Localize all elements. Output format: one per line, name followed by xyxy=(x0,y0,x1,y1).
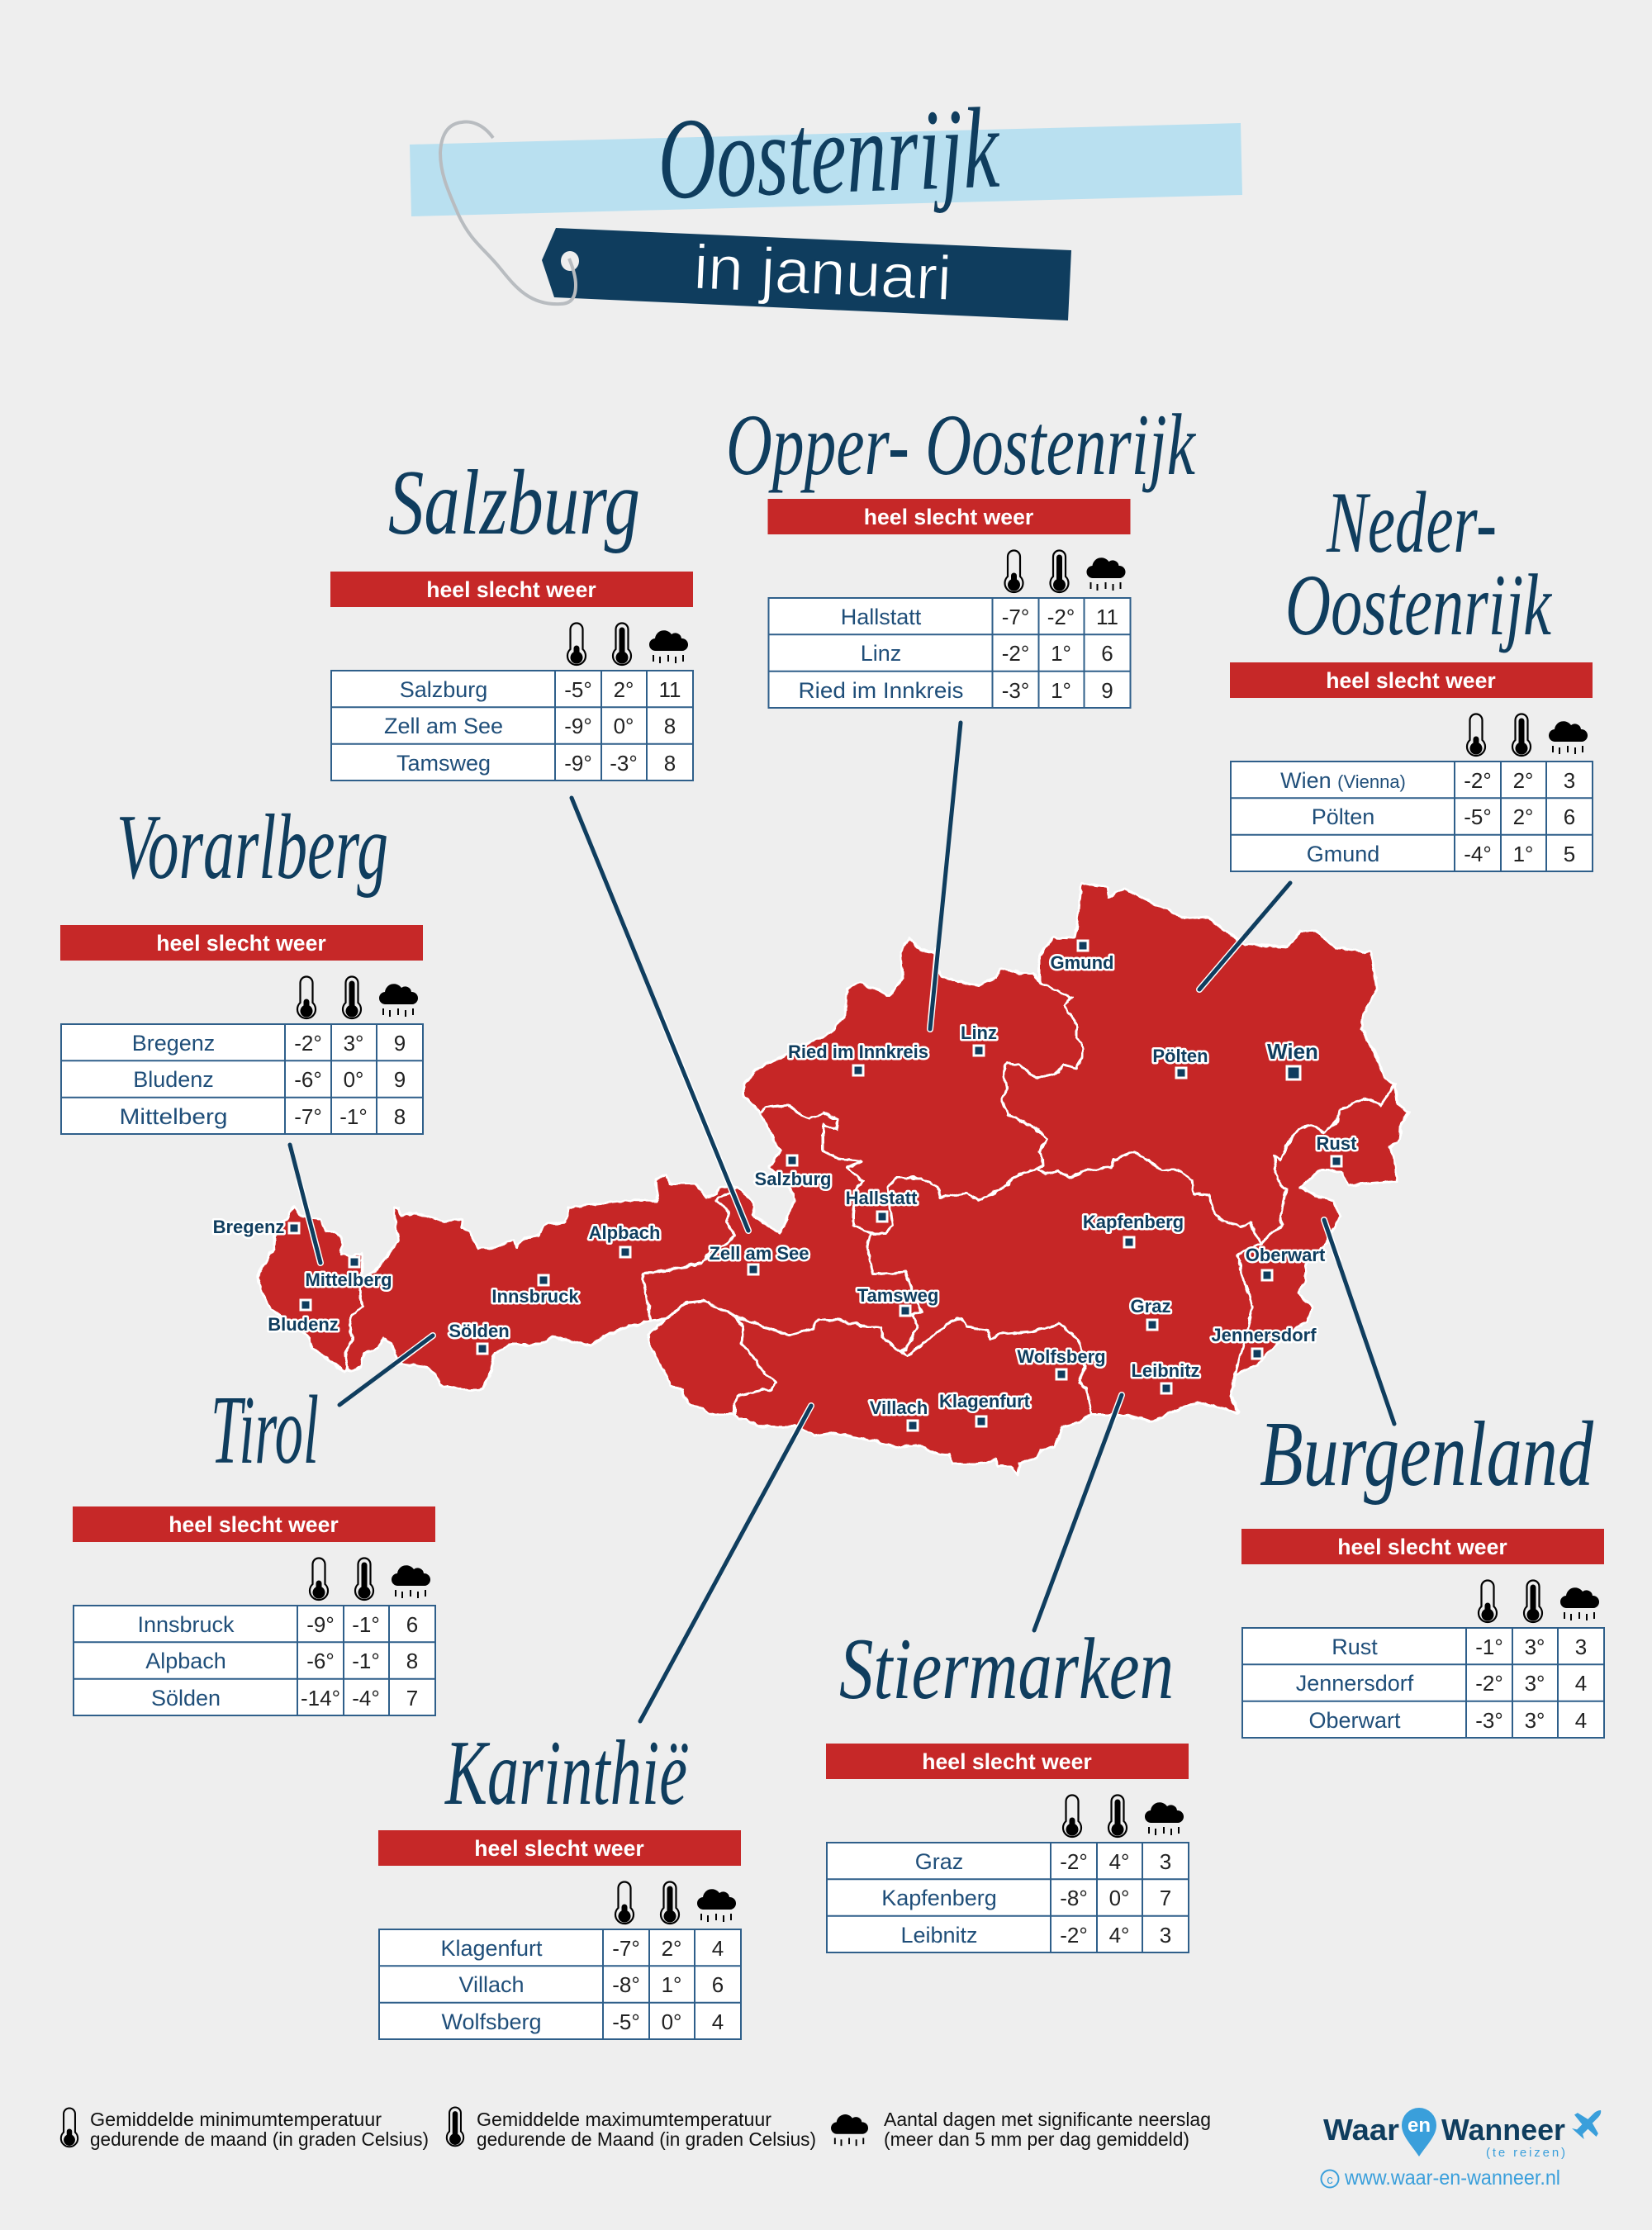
table xyxy=(1231,762,1593,871)
panel body: Opper-Oostenrijk xyxy=(768,499,1130,708)
city labels: Bludenz xyxy=(268,1314,339,1335)
city labels xyxy=(213,952,1357,1418)
legend: min temp: gedurende de maand (in graden Celsius) xyxy=(90,2128,429,2150)
table: 3° xyxy=(1525,1708,1545,1733)
city labels: Graz xyxy=(1131,1296,1170,1317)
icon: plane xyxy=(1572,2110,1601,2139)
city labels: Kapfenberg xyxy=(1083,1212,1184,1232)
table: Linz xyxy=(861,641,901,666)
table: -1° xyxy=(352,1612,380,1637)
table: Tamsweg xyxy=(396,751,491,776)
icons xyxy=(615,1881,736,1924)
table: 9 xyxy=(394,1031,406,1056)
region: Tirol xyxy=(345,1174,738,1389)
table: Rust xyxy=(1332,1635,1378,1659)
city labels: Hallstatt xyxy=(846,1188,918,1208)
table: -4° xyxy=(1464,842,1492,866)
table xyxy=(379,1929,741,2039)
table: Oberwart xyxy=(1308,1708,1401,1733)
rating banner xyxy=(330,572,693,607)
table xyxy=(827,1843,1189,1952)
panel: Opper-Oostenrijk xyxy=(726,396,1197,708)
table: -3° xyxy=(1002,678,1029,703)
logo word: Wanneer: Wanneer xyxy=(1441,2113,1565,2147)
rating banner: heel slecht weer xyxy=(426,577,596,602)
table: 9 xyxy=(1101,678,1113,703)
table: -5° xyxy=(612,2009,640,2034)
panel: Neder-Oostenrijk xyxy=(1230,473,1593,871)
table: 8 xyxy=(406,1649,418,1673)
city labels: Sölden xyxy=(449,1321,510,1341)
table: 6 xyxy=(712,1972,724,1997)
city labels: Rust xyxy=(1317,1133,1357,1154)
table: 6 xyxy=(1564,804,1575,829)
heading: Neder-Oostenrijk: Oostenrijk xyxy=(1285,556,1553,653)
panel body: Burgenland xyxy=(1241,1529,1604,1738)
table: -2° xyxy=(1464,768,1492,793)
rating banner xyxy=(378,1830,741,1866)
table: 8 xyxy=(394,1104,406,1129)
rating banner: heel slecht weer xyxy=(156,931,326,956)
table: Salzburg xyxy=(400,677,487,702)
table: 2° xyxy=(614,677,634,702)
leader: Neder-Oostenrijk xyxy=(1199,883,1290,989)
table: Sölden xyxy=(151,1686,221,1710)
rating banner: heel slecht weer xyxy=(864,505,1033,529)
table: Wolfsberg xyxy=(441,2009,542,2034)
table: -8° xyxy=(612,1972,640,1997)
region: Karinthie xyxy=(731,1313,1091,1475)
logo pin: en xyxy=(1408,2114,1431,2137)
rating banner xyxy=(60,925,423,961)
table: 3° xyxy=(344,1031,363,1056)
table: -6° xyxy=(306,1649,335,1673)
table: -1° xyxy=(1475,1635,1503,1659)
rating banner xyxy=(1230,662,1593,698)
city labels: Mittelberg xyxy=(305,1269,392,1290)
leader: Stiermarken xyxy=(1034,1395,1122,1630)
city labels: Tamsweg xyxy=(857,1285,938,1306)
region: Salzburg xyxy=(643,1105,921,1351)
legend: max temp: gedurende de Maand (in graden Celsius) xyxy=(477,2128,816,2150)
table: -2° xyxy=(1475,1671,1503,1696)
table xyxy=(74,1606,435,1715)
table: 3 xyxy=(1564,768,1575,793)
city labels: Oberwart xyxy=(1246,1245,1326,1265)
heading: Karinthie: Karinthië xyxy=(444,1722,688,1824)
logo xyxy=(1322,2108,1601,2190)
table xyxy=(768,598,1130,708)
rating banner xyxy=(826,1744,1189,1779)
table: Zell am See xyxy=(384,714,503,738)
table: -2° xyxy=(1060,1923,1088,1948)
table: -9° xyxy=(306,1612,335,1637)
city labels: Salzburg xyxy=(755,1169,831,1189)
table: Gmund xyxy=(1307,842,1379,866)
table: -2° xyxy=(294,1031,322,1056)
legend: max temp: Gemiddelde maximumtemperatuur xyxy=(477,2109,771,2130)
table xyxy=(61,1024,423,1134)
rating banner xyxy=(1241,1529,1604,1564)
heading: Vorarlberg: Vorarlberg xyxy=(116,796,388,899)
table: -14° xyxy=(301,1686,340,1710)
legend xyxy=(61,2107,1211,2150)
table: 3 xyxy=(1575,1635,1587,1659)
table: Ried im Innkreis xyxy=(798,678,963,703)
table: Jennersdorf xyxy=(1296,1671,1414,1696)
leader: Vorarlberg xyxy=(290,1145,320,1263)
city labels: Klagenfurt xyxy=(939,1391,1031,1412)
city labels: Gmund xyxy=(1051,952,1113,973)
table: Bludenz xyxy=(133,1067,214,1092)
tag xyxy=(542,228,1071,320)
table: -3° xyxy=(1475,1708,1503,1733)
tag string xyxy=(440,122,576,304)
table: -5° xyxy=(564,677,592,702)
rating banner xyxy=(768,499,1130,534)
region: Vorarlberg xyxy=(257,1206,363,1372)
leader: Salzburg xyxy=(572,798,748,1231)
table: 0° xyxy=(662,2009,681,2034)
legend: rain days xyxy=(831,2109,1211,2150)
heading: Stiermarken: Stiermarken xyxy=(839,1620,1174,1717)
table: 8 xyxy=(664,751,676,776)
leader: Tirol xyxy=(339,1336,433,1405)
table: 7 xyxy=(406,1686,418,1710)
rating banner: heel slecht weer xyxy=(1337,1535,1507,1559)
icons xyxy=(1467,714,1588,756)
table: -4° xyxy=(352,1686,380,1710)
table: -2° xyxy=(1047,605,1075,629)
legend: min temp: Gemiddelde minimumtemperatuur xyxy=(90,2109,382,2130)
leader: Burgenland xyxy=(1324,1220,1394,1424)
city labels: Ried im Innkreis xyxy=(788,1041,928,1062)
leader lines xyxy=(290,723,1394,1721)
table: Hallstatt xyxy=(841,605,922,629)
table: 1° xyxy=(1513,842,1533,866)
table: 2° xyxy=(662,1936,681,1961)
rating banner: heel slecht weer xyxy=(922,1749,1092,1774)
table: 0° xyxy=(614,714,634,738)
table: Kapfenberg xyxy=(881,1886,997,1910)
title ribbon xyxy=(410,123,1242,216)
table: -2° xyxy=(1002,641,1029,666)
table: 4° xyxy=(1109,1923,1129,1948)
table: 5 xyxy=(1564,842,1575,866)
table: 6 xyxy=(406,1612,418,1637)
rating banner: heel slecht weer xyxy=(474,1836,644,1861)
city labels: Wolfsberg xyxy=(1017,1346,1106,1367)
table: Wien (Vienna) xyxy=(1280,768,1406,793)
legend: max temp xyxy=(447,2107,816,2150)
city markers xyxy=(289,941,1341,1431)
table: Leibnitz xyxy=(900,1923,978,1948)
copyright and url: c xyxy=(1327,2173,1333,2187)
heading: Salzburg: Salzburg xyxy=(388,452,640,554)
heading: Opper-Oostenrijk: Opper- Oostenrijk xyxy=(726,396,1197,493)
table: Alpbach xyxy=(145,1649,226,1673)
title block xyxy=(410,84,1242,320)
table: 3° xyxy=(1525,1671,1545,1696)
title text: Oostenrijk xyxy=(656,84,1003,224)
panel body: Tirol xyxy=(73,1506,435,1715)
icons xyxy=(567,623,688,665)
table: 3° xyxy=(1525,1635,1545,1659)
panel: Karinthie xyxy=(378,1722,741,2039)
city labels: Leibnitz xyxy=(1131,1360,1200,1381)
table: 3 xyxy=(1160,1849,1171,1874)
city labels: Alpbach xyxy=(589,1222,660,1243)
region: Burgenland xyxy=(1235,1084,1409,1375)
table: Graz xyxy=(915,1849,963,1874)
city labels: Pölten xyxy=(1152,1046,1208,1066)
table: 1° xyxy=(662,1972,681,1997)
subtitle text: in januari xyxy=(692,232,953,314)
panel body: Neder-Oostenrijk xyxy=(1230,662,1593,871)
rating banner: heel slecht weer xyxy=(169,1512,339,1537)
austria map xyxy=(257,883,1409,1475)
heading: Burgenland: Burgenland xyxy=(1260,1403,1594,1506)
panel: Salzburg xyxy=(330,452,693,780)
table: 4 xyxy=(712,1936,724,1961)
table xyxy=(331,671,693,780)
region: Stiermarken xyxy=(867,1151,1260,1422)
table: Pölten xyxy=(1312,804,1374,829)
table: 9 xyxy=(394,1067,406,1092)
legend: rain days: (meer dan 5 mm per dag gemiddeld) xyxy=(884,2128,1189,2150)
table: 2° xyxy=(1513,804,1533,829)
table: 11 xyxy=(659,677,681,702)
icons xyxy=(1063,1796,1184,1837)
leader: Opper-Oostenrijk xyxy=(930,723,961,1029)
panel: Burgenland xyxy=(1241,1403,1604,1738)
city labels: Linz xyxy=(961,1022,997,1043)
table: -7° xyxy=(1002,605,1029,629)
city labels: Wien xyxy=(1267,1039,1318,1064)
logo word: Waar: Waar xyxy=(1323,2113,1399,2147)
table xyxy=(1242,1628,1604,1738)
city labels: Jennersdorf xyxy=(1211,1325,1317,1345)
heading: Tirol: Tirol xyxy=(211,1376,319,1485)
panel: Vorarlberg xyxy=(60,796,423,1134)
table: 0° xyxy=(1109,1886,1129,1910)
icons xyxy=(1004,550,1126,592)
city labels: Villach xyxy=(870,1397,928,1418)
panel body: Vorarlberg xyxy=(60,925,423,1134)
table: 4 xyxy=(712,2009,724,2034)
table: -2° xyxy=(1060,1849,1088,1874)
icons xyxy=(310,1558,430,1600)
icons xyxy=(1479,1581,1599,1622)
city labels: Innsbruck xyxy=(491,1286,579,1307)
table: 11 xyxy=(1096,605,1118,629)
table: 4 xyxy=(1575,1671,1587,1696)
rating banner xyxy=(73,1506,435,1542)
panel body: Karinthie xyxy=(378,1830,741,2039)
leader: Karinthie xyxy=(640,1406,811,1721)
icons xyxy=(297,976,418,1018)
table: 7 xyxy=(1160,1886,1171,1910)
city labels: Zell am See xyxy=(709,1243,809,1264)
table: Villach xyxy=(458,1972,525,1997)
table: 4° xyxy=(1109,1849,1129,1874)
table: -6° xyxy=(294,1067,322,1092)
table: -8° xyxy=(1060,1886,1088,1910)
rating banner: heel slecht weer xyxy=(1326,668,1496,693)
table: -1° xyxy=(339,1104,368,1129)
table: 0° xyxy=(344,1067,363,1092)
table: 6 xyxy=(1101,641,1113,666)
legend: rain days: Aantal dagen met significante neerslag xyxy=(884,2109,1211,2130)
panel body: Salzburg xyxy=(330,572,693,780)
logo pin xyxy=(1402,2108,1436,2156)
table: 3 xyxy=(1160,1923,1171,1948)
table: 8 xyxy=(664,714,676,738)
table: -7° xyxy=(294,1104,322,1129)
tag hole xyxy=(561,251,579,271)
copyright and url: www.waar-en-wanneer.nl xyxy=(1344,2166,1560,2190)
table: Mittelberg xyxy=(119,1104,228,1129)
legend: min temp xyxy=(61,2108,429,2150)
table: -7° xyxy=(612,1936,640,1961)
panel body: Stiermarken xyxy=(826,1744,1189,1952)
table: Innsbruck xyxy=(137,1612,235,1637)
table: 1° xyxy=(1051,641,1071,666)
table: 1° xyxy=(1051,678,1071,703)
table: -3° xyxy=(610,751,638,776)
region: Neder-Oostenrijk xyxy=(1002,883,1395,1243)
table: -9° xyxy=(564,751,592,776)
table: 4 xyxy=(1575,1708,1587,1733)
panel: Tirol xyxy=(73,1376,435,1715)
table: Bregenz xyxy=(132,1031,215,1056)
panel: Stiermarken xyxy=(826,1620,1189,1952)
table: Klagenfurt xyxy=(440,1936,543,1961)
table: -1° xyxy=(352,1649,380,1673)
table: 2° xyxy=(1513,768,1533,793)
logo tagline: (te reizen) xyxy=(1486,2146,1565,2160)
heading: Neder-Oostenrijk: Neder- xyxy=(1326,473,1497,571)
heading: Neder-Oostenrijk xyxy=(1285,473,1553,653)
region: Oost-Tirol xyxy=(647,1301,776,1415)
table: -9° xyxy=(564,714,592,738)
region: Opper-Oostenrijk xyxy=(743,938,1082,1233)
table: -5° xyxy=(1464,804,1492,829)
city labels: Bregenz xyxy=(213,1217,284,1237)
